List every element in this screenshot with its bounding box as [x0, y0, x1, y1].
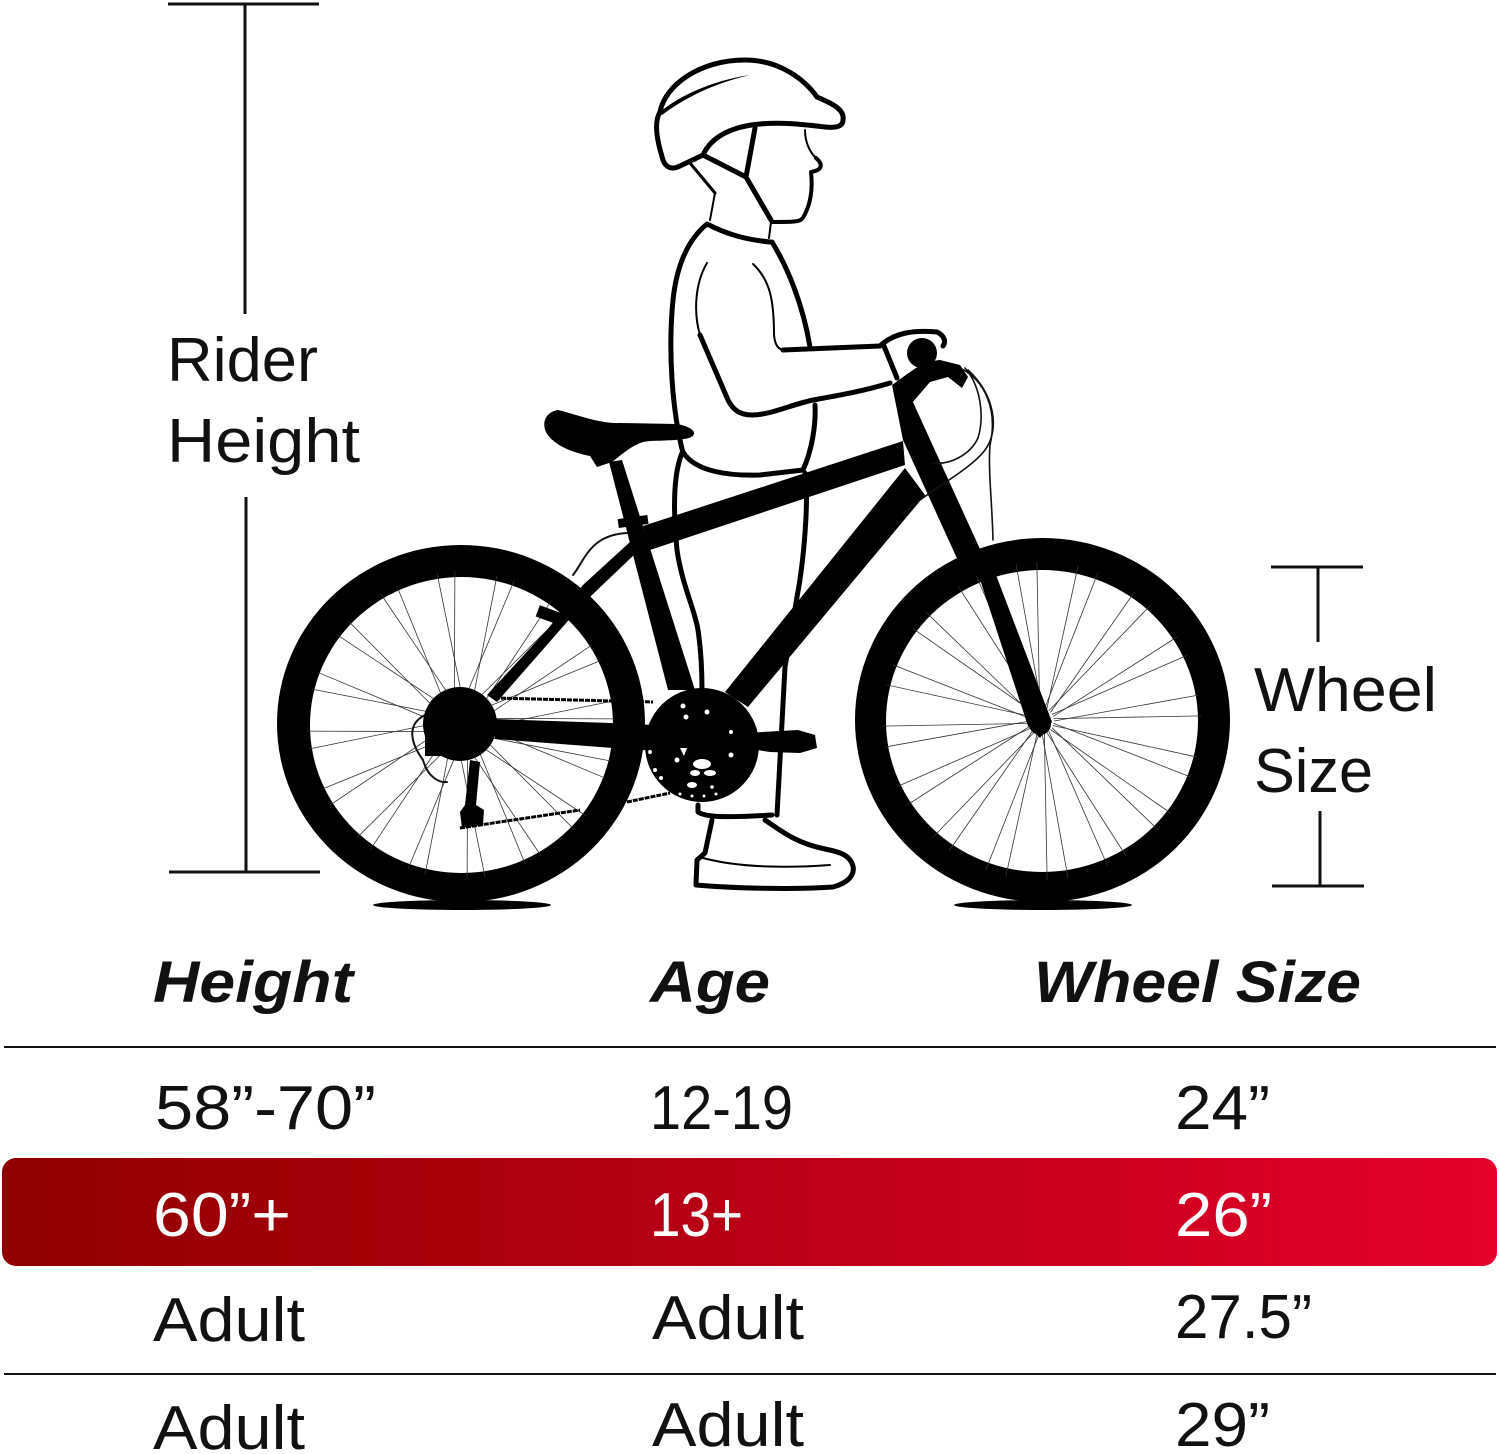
chain stay [495, 719, 700, 752]
highlighted values: 60”+ [153, 1181, 291, 1250]
legs [674, 453, 806, 817]
size table [2, 950, 1497, 1454]
row: 24 inch: 12-19 [650, 1074, 793, 1143]
label: rider height: Rider [167, 326, 318, 395]
row: 27.5 inch: Adult [153, 1286, 305, 1355]
dimension: rider height [167, 4, 360, 872]
dimension: wheel size [1254, 567, 1437, 886]
label: wheel size: Size [1254, 737, 1373, 806]
top tube [643, 441, 905, 550]
handlebar grip and levers [892, 338, 968, 403]
highlight band [2, 1158, 1497, 1266]
helmet [657, 60, 843, 168]
label: wheel size: Wheel [1254, 656, 1437, 725]
chain [460, 698, 670, 828]
illustration: rider with bicycle [277, 60, 1230, 910]
row: 24 inch [155, 1074, 1270, 1143]
row: 24 inch: 58”-70” [155, 1074, 376, 1143]
label: wheel size [1254, 656, 1437, 806]
row: 24 inch: 24” [1175, 1074, 1270, 1143]
head and strap [690, 128, 821, 238]
rear cassette [423, 687, 497, 761]
row: 27.5 inch: 27.5” [1175, 1283, 1312, 1352]
label: rider height: Height [167, 407, 360, 476]
rear wheel [277, 545, 645, 902]
torso [671, 224, 815, 475]
down tube [725, 468, 925, 707]
shoe [696, 820, 853, 888]
front wheel [855, 538, 1230, 902]
table headers: Age [648, 950, 770, 1015]
pedal [745, 730, 817, 753]
seat tube and saddle [544, 410, 695, 690]
table headers: Height [153, 950, 356, 1015]
row: 29 inch [153, 1391, 1270, 1454]
brake and gear cables [412, 368, 993, 782]
row: 27.5 inch: Adult [652, 1284, 804, 1353]
rear derailleur [460, 760, 484, 828]
chainring and crank [645, 688, 759, 802]
rider outline [657, 60, 945, 888]
seat stay [487, 542, 636, 702]
row: 26 inch highlighted [2, 1158, 1497, 1266]
table headers [153, 950, 1361, 1015]
head tube and fork [892, 385, 1052, 738]
table headers: Wheel Size [1034, 950, 1361, 1015]
label: rider height [167, 326, 360, 476]
highlighted values: 13+ [650, 1181, 743, 1250]
brake clamp [536, 605, 562, 625]
arm and hand [696, 263, 945, 415]
ground shadows [373, 900, 1132, 910]
highlighted values: 26” [1175, 1181, 1272, 1250]
highlighted values [153, 1181, 1272, 1250]
row: 27.5 inch [153, 1283, 1312, 1355]
bicycle frame [412, 338, 1052, 828]
